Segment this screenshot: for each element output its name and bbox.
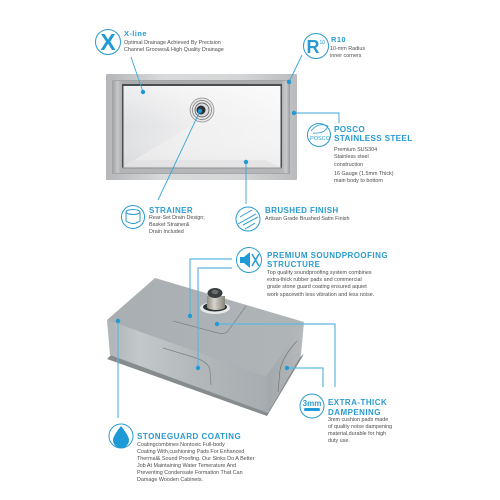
text: strainer [149, 215, 205, 235]
text: X-line: Channel Grooves& High Quality Drainage [124, 47, 224, 53]
icon: POSCO: POSCO [310, 136, 331, 142]
heading: R10: R10 [331, 35, 346, 44]
icon: R10: 10 [320, 40, 325, 46]
bottom sink [107, 278, 304, 416]
text: X-line [124, 40, 224, 53]
text: brushed finish: Artisan Grade Brushed Satin Finish [265, 216, 350, 222]
icon: R10: R [306, 37, 320, 57]
heading: soundproofing: STRUCTURE [267, 260, 320, 269]
text: stoneguard [137, 442, 254, 483]
text: POSCO: Stainless steel [334, 154, 369, 160]
icon: soundproofing [236, 248, 262, 272]
heading: POSCO: STAINLESS STEEL [334, 134, 412, 143]
icon: X-line: X [100, 29, 116, 55]
icon: water drop [109, 424, 133, 448]
icon: X-line [96, 29, 120, 55]
text: stoneguard: Coating With,cushioning Pads For Enhanced [137, 449, 244, 455]
text: R10 [330, 46, 365, 59]
text: R10: inner corners [330, 53, 361, 59]
text: soundproofing: work spacewith less vibration and less noise. [267, 292, 374, 298]
text: POSCO [334, 147, 377, 168]
text: dampening: material,durable for high [328, 431, 386, 437]
icon: strainer [122, 206, 144, 228]
text: stoneguard: Preventing Condensate Formation That Can [137, 470, 243, 476]
icon: brushed finish [236, 207, 260, 231]
icon: 3mm [300, 394, 324, 418]
top sink [106, 74, 297, 180]
text: strainer: Drain Included [149, 229, 184, 235]
text: soundproofing [267, 270, 374, 298]
callout dots [116, 80, 296, 370]
heading: dampening: EXTRA-THICK [328, 398, 387, 407]
text: POSCO: Premium SUS304 [334, 147, 377, 153]
text: dampening: 3mm cushion pads made [328, 417, 388, 423]
text: soundproofing: Top quality soundproofing system combines [267, 270, 372, 276]
drain fitting [200, 288, 230, 314]
heading: brushed finish: BRUSHED FINISH [265, 206, 339, 215]
text: strainer: Basket Strainer& [149, 222, 189, 228]
text: POSCO: construction [334, 162, 363, 168]
heading: strainer: STRAINER [149, 206, 193, 215]
heading: POSCO [334, 125, 412, 143]
heading: POSCO: POSCO [334, 125, 365, 134]
text: soundproofing: grade stone guard coating ensured aquiet [267, 284, 367, 290]
text: strainer: Rear-Set Drain Design; [149, 215, 205, 221]
text: dampening [328, 417, 392, 444]
heading: dampening [328, 398, 387, 416]
drain [190, 98, 214, 122]
text: gauge: 16 Gauge (1.5mm Thick) [334, 171, 394, 177]
text: R10: 10-mm Radius [330, 46, 365, 52]
text: stoneguard: Damage Wooden Cabinets. [137, 477, 203, 483]
text: gauge [334, 171, 394, 184]
heading: soundproofing: PREMIUM SOUNDPROOFING [267, 251, 388, 260]
icon: R10 [304, 34, 328, 58]
heading: soundproofing [267, 251, 388, 269]
text: gauge: main body to bottom [334, 178, 383, 184]
heading: dampening: DAMPENING [328, 408, 381, 416]
icon: POSCO [308, 124, 331, 146]
callout lines [131, 55, 339, 204]
text: stoneguard: Coatingcombines Nontoxic Full-body [137, 442, 225, 448]
text: dampening: of quality noise dampening [328, 424, 392, 430]
text: soundproofing: extra-thick rubber pads and commercial [267, 277, 362, 283]
text: stoneguard: Job At Maintaining Water Temerature And [137, 463, 236, 469]
heading: X-line: X-line [124, 29, 147, 38]
text: stoneguard: Thermal& Sound Proofing. Our Sinks Do A Better [137, 456, 254, 462]
heading: stoneguard: STONEGUARD COATING [137, 432, 241, 441]
icon: 3mm: 3mm [303, 399, 321, 408]
text: X-line: Optimal Drainage Achieved By Precision [124, 40, 221, 46]
text: dampening: duty use. [328, 438, 350, 444]
